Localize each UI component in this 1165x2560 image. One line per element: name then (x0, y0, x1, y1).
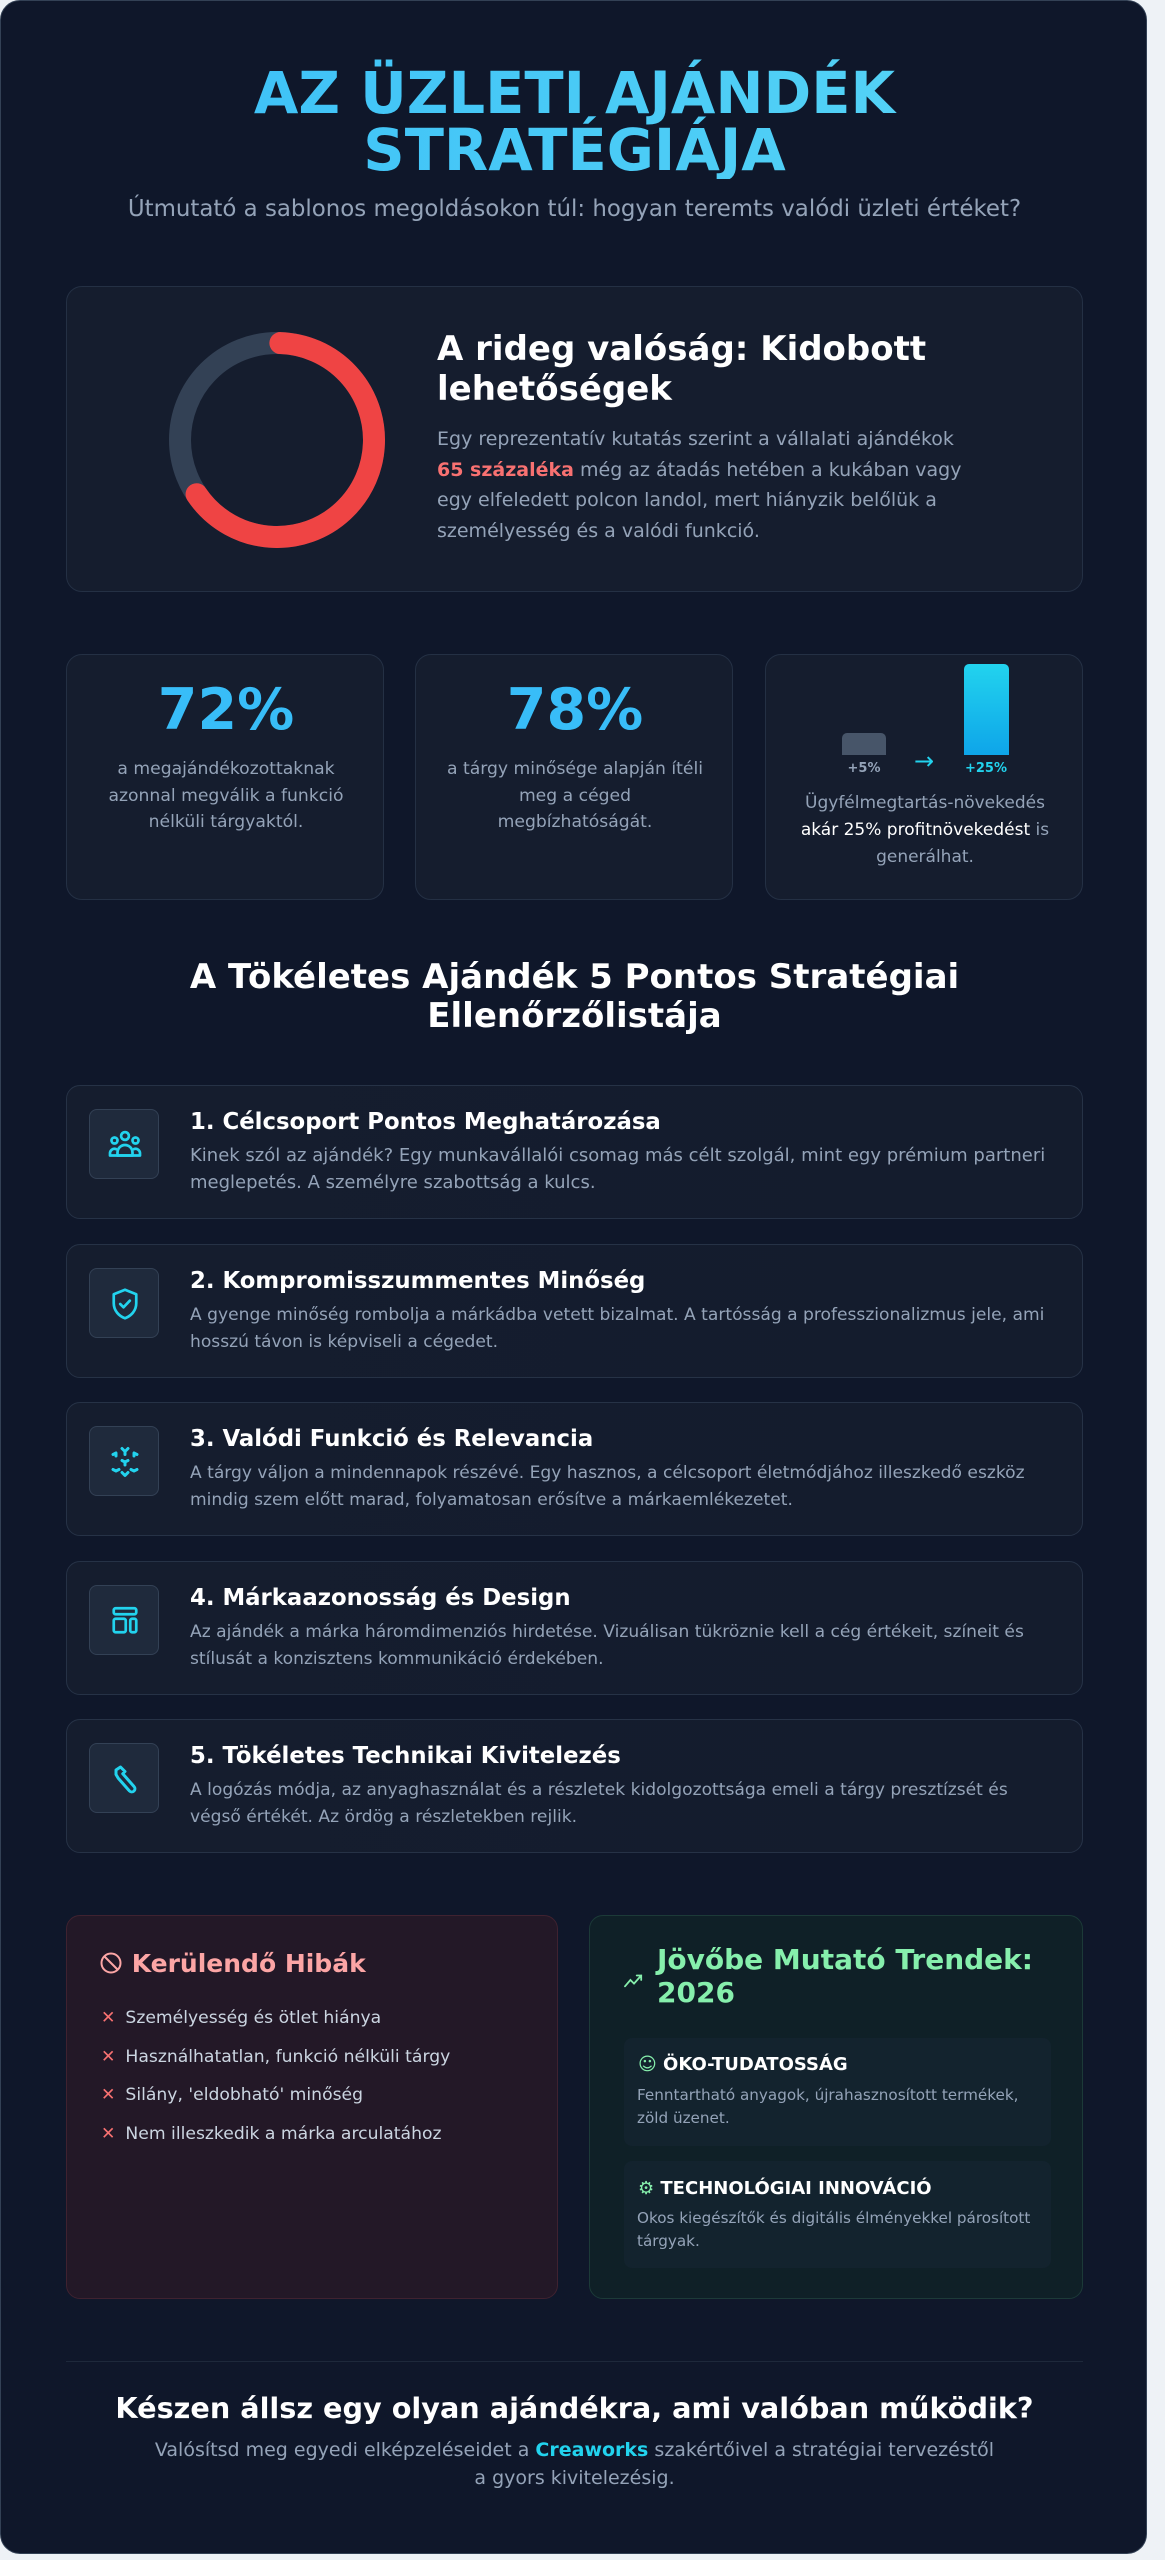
number: 78% (507, 677, 643, 743)
panel: trends (589, 1915, 1083, 2299)
icon: trend (624, 1974, 642, 1988)
heading (655, 1943, 1033, 2009)
icon: people (89, 1109, 159, 1179)
description: akár 25% profitnövekedést is (801, 820, 1049, 840)
section heading: Ellenőrzőlistája (427, 996, 722, 1036)
description (801, 792, 1049, 867)
description (190, 1463, 1025, 1510)
section heading: A Tökéletes Ajándék 5 Pontos Stratégiai (190, 957, 959, 997)
checklist item 3 (66, 1402, 1083, 1536)
panel: retention chart (765, 654, 1083, 900)
description: megbízhatóságát. (498, 812, 652, 832)
description (447, 759, 703, 832)
CTA text (155, 2439, 994, 2489)
text block (437, 428, 962, 542)
checklist item 4 (66, 1561, 1083, 1695)
description (190, 1780, 1008, 1826)
bar chart (842, 664, 1009, 776)
bar chart: +25% (965, 761, 1007, 776)
section heading (190, 957, 959, 1036)
heading with icon: Kerülendő Hibák (132, 1949, 366, 1978)
panel: stat 72% (66, 654, 384, 900)
title: 4. Márkaazonosság és Design (190, 1585, 571, 1611)
list (101, 2008, 450, 2144)
description: A tárgy váljon a mindennapok részévé. Egy hasznos, a célcsoport életmódjához illeszkedő eszköz (190, 1463, 1025, 1483)
description: meglepetés. A személyre szabottság a kulcs. (190, 1172, 596, 1192)
description: stílusát a konzisztens kommunikáció érdekében. (190, 1648, 604, 1668)
trend: eco: Fenntartható anyagok, újrahasznosított termékek, (637, 2086, 1018, 2104)
list: ✕ Nem illeszkedik a márka arculatához (101, 2124, 442, 2144)
number: 72% (158, 677, 294, 743)
description: A gyenge minőség rombolja a márkádba vetett bizalmat. A tartósság a professzionalizmus jele, ami (190, 1305, 1044, 1325)
description: Az ajándék a márka háromdimenziós hirdetése. Vizuálisan tükröznie kell a cég értékeit, színeit és (190, 1622, 1024, 1642)
trend: eco: zöld üzenet. (637, 2109, 730, 2127)
checklist item 1 (66, 1085, 1083, 1219)
title (1, 51, 1148, 179)
title: STRATÉGIÁJA (363, 117, 786, 184)
title: 5. Tökéletes Technikai Kivitelezés (190, 1743, 621, 1769)
description: a tárgy minősége alapján ítéli (447, 759, 703, 779)
trend: tech: Okos kiegészítők és digitális élményekkel párosított (637, 2209, 1030, 2227)
title: 1. Célcsoport Pontos Meghatározása (190, 1109, 661, 1135)
icon: shield (89, 1268, 159, 1338)
list: ✕ Személyesség és ötlet hiánya (101, 2008, 381, 2028)
trend: eco: ☺ ÖKO-TUDATOSSÁG (638, 2054, 848, 2075)
panel: mistakes (66, 1915, 558, 2299)
description (190, 1622, 1024, 1668)
heading: Jövőbe Mutató Trendek: (657, 1943, 1033, 1976)
description (190, 1145, 1045, 1192)
trend: tech: ⚙ TECHNOLÓGIAI INNOVÁCIÓ (638, 2178, 932, 2199)
text block: 65 százaléka még az átadás hetében a kukában vagy (437, 459, 962, 481)
CTA text: a gyors kivitelezésig. (474, 2467, 675, 2489)
heading: 2026 (657, 1976, 735, 2009)
CTA text: Valósítsd meg egyedi elképzeléseidet a Creaworks szakértőivel a stratégiai tervezéstől (155, 2439, 994, 2461)
description: generálhat. (876, 847, 974, 867)
title: AZ ÜZLETI AJÁNDÉK (254, 60, 895, 127)
title: 3. Valódi Funkció és Relevancia (190, 1426, 593, 1452)
trend: tech: tárgyak. (637, 2232, 700, 2250)
title: 2. Kompromisszummentes Minőség (190, 1268, 645, 1294)
heading (437, 329, 926, 409)
subtitle: Útmutató a sablonos megoldásokon túl: hogyan teremts valódi üzleti értéket? (128, 196, 1021, 222)
description: Kinek szól az ajándék? Egy munkavállalói csomag más célt szolgál, mint egy prémium partneri (190, 1145, 1045, 1166)
icon: layout (89, 1585, 159, 1655)
text block: Egy reprezentatív kutatás szerint a vállalati ajándékok (437, 428, 954, 450)
description (190, 1305, 1044, 1352)
description: nélküli tárgyaktól. (149, 812, 303, 832)
checklist item 5 (66, 1719, 1083, 1853)
text block: személyesség és a valódi funkció. (437, 520, 760, 542)
list: ✕ Használhatatlan, funkció nélküli tárgy (101, 2047, 450, 2067)
icon: focus arrows (89, 1426, 159, 1496)
bar chart: +5% (848, 761, 880, 776)
description: azonnal megválik a funkció (108, 786, 344, 806)
description (108, 759, 344, 832)
description: meg a céged (519, 786, 631, 806)
bar chart: → (914, 747, 934, 775)
panel: reality card (66, 286, 1083, 592)
icon: wrench (89, 1743, 159, 1813)
panel: stat 78% (415, 654, 733, 900)
description: A logózás módja, az anyaghasználat és a részletek kidolgozottsága emeli a tárgy presztízsét és (190, 1780, 1008, 1800)
heading: lehetőségek (437, 369, 672, 409)
description: Ügyfélmegtartás-növekedés (805, 793, 1045, 813)
CTA heading: Készen állsz egy olyan ajándékra, ami valóban működik? (115, 2391, 1034, 2425)
description: mindig szem előtt marad, folyamatosan erősítve a márkaemlékezetet. (190, 1490, 793, 1510)
checklist item 2 (66, 1244, 1083, 1378)
heading: A rideg valóság: Kidobott (437, 329, 926, 369)
donut chart 65% (169, 332, 385, 548)
trend: tech (624, 2161, 1051, 2268)
description: hosszú távon is képviseli a cégedet. (190, 1332, 498, 1352)
description: végső értékét. Az ördög a részletekben rejlik. (190, 1806, 577, 1826)
trend: eco (624, 2038, 1051, 2146)
text block: egy elfeledett polcon landol, mert hiányzik belőlük a (437, 489, 937, 511)
list: ✕ Silány, 'eldobható' minőség (101, 2085, 363, 2105)
description: a megajándékozottaknak (117, 759, 335, 779)
